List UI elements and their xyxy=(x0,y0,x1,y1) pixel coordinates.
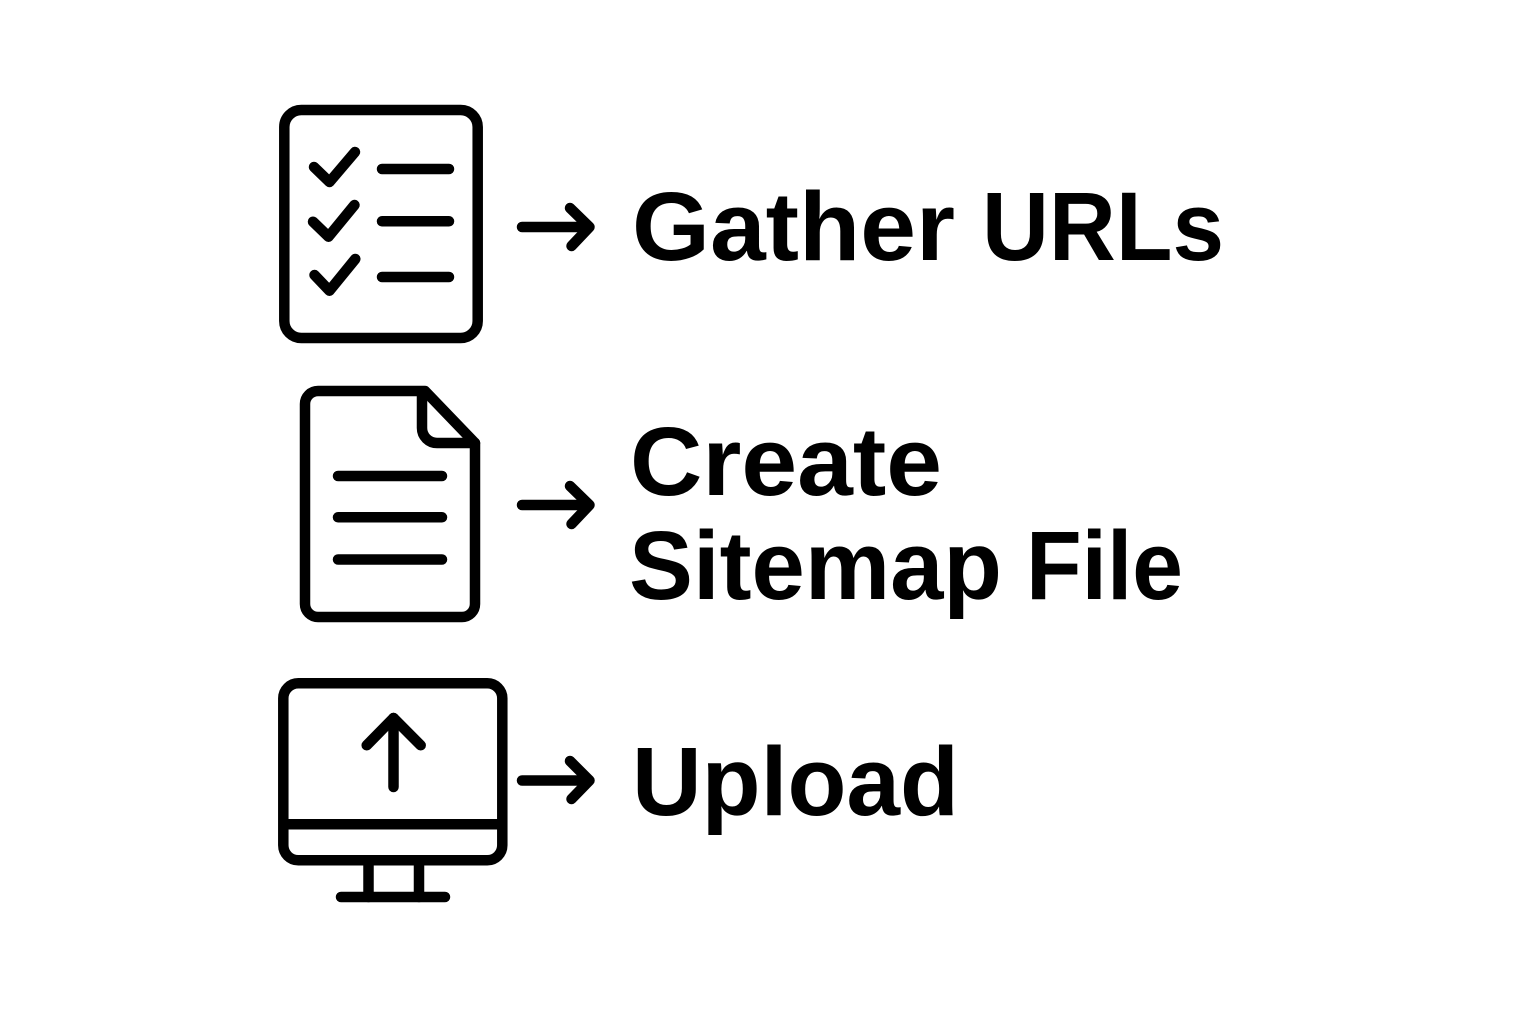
heading: Create Sitemap File: Sitemap xyxy=(629,511,1002,620)
heading: Gather URLs: URLs xyxy=(982,172,1224,281)
icon: monitor with upload arrow xyxy=(283,683,502,897)
arrow: checklist to gather URLs xyxy=(522,208,590,246)
icon: checklist xyxy=(284,110,478,338)
heading: Create Sitemap File: File xyxy=(1026,511,1183,620)
heading: Upload: Upload xyxy=(632,727,959,836)
heading: Create Sitemap File: Create xyxy=(630,407,942,516)
heading: Gather URLs xyxy=(632,172,1224,281)
heading: Gather URLs: Gather xyxy=(632,172,955,281)
arrow: document to create sitemap file xyxy=(522,486,590,524)
arrow: monitor to upload xyxy=(522,761,590,799)
heading: Create Sitemap File xyxy=(629,407,1183,620)
icon: document xyxy=(305,391,475,617)
